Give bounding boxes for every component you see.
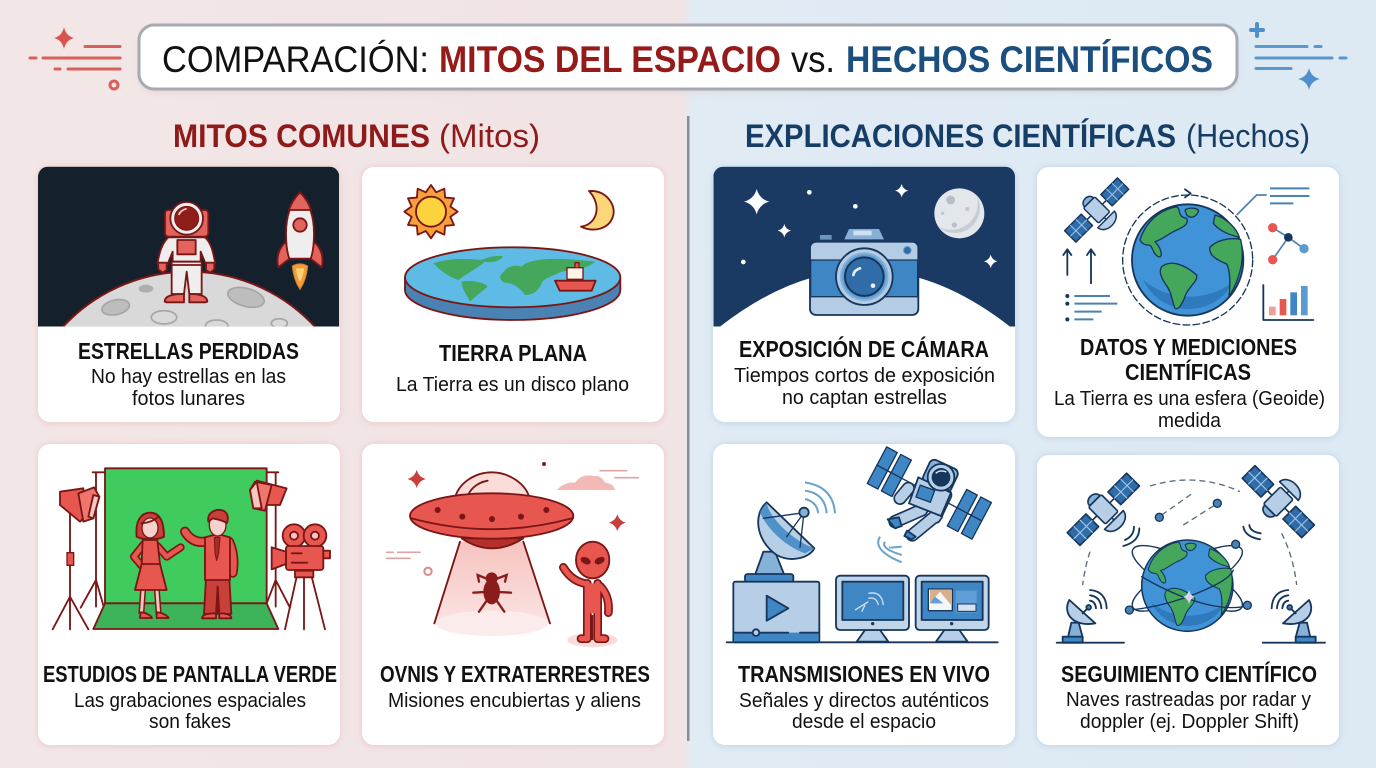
title: MITOS DEL ESPACIO — [439, 39, 781, 80]
icon: flat earth with sun and moon — [404, 185, 620, 320]
card text: no captan estrellas — [782, 386, 947, 409]
card title: ESTUDIOS DE PANTALLA VERDE — [43, 661, 337, 687]
icon: ufo, spider and alien — [387, 462, 638, 647]
icon: right sparkle decoration — [1251, 24, 1346, 90]
card text — [734, 364, 995, 409]
card title: DATOS Y MEDICIONES — [1080, 334, 1297, 360]
card text: No hay estrellas en las — [91, 365, 286, 388]
panel: tierra plana — [361, 166, 665, 424]
card text: Tiempos cortos de exposición — [734, 364, 995, 387]
title — [139, 25, 1237, 92]
card text — [74, 689, 306, 733]
card title: TIERRA PLANA — [439, 340, 587, 366]
card text: fotos lunares — [132, 387, 245, 410]
card text: Señales y directos auténticos — [739, 689, 989, 712]
panel: ovnis y extraterrestres — [361, 443, 665, 747]
card text: La Tierra es un disco plano — [396, 373, 629, 396]
panel: seguimiento científico — [1036, 454, 1340, 747]
card title: OVNIS Y EXTRATERRESTRES — [380, 661, 650, 687]
card text — [1054, 387, 1325, 432]
icon: earth tracked by satellites and radars — [1057, 455, 1325, 643]
icon: astronaut on moon with rocket — [38, 166, 340, 327]
card title: EXPOSICIÓN DE CÁMARA — [739, 335, 989, 362]
title: vs. — [791, 39, 835, 80]
card text — [1066, 688, 1312, 733]
card title: ESTRELLAS PERDIDAS — [78, 338, 299, 364]
card title: CIENTÍFICAS — [1125, 358, 1251, 385]
panel: estrellas perdidas — [36, 165, 342, 425]
card title: SEGUIMIENTO CIENTÍFICO — [1061, 660, 1317, 687]
heading: explicaciones científicas: EXPLICACIONES CIENTÍFICAS — [745, 118, 1176, 154]
icon: satellite dish, astronaut and monitors — [727, 447, 998, 642]
icon: green screen studio — [53, 468, 330, 629]
heading: mitos comunes: MITOS COMUNES — [173, 118, 430, 154]
card text — [739, 689, 989, 733]
icon: earth with satellite and data — [1059, 172, 1313, 325]
icon: left sparkle decoration — [30, 27, 120, 89]
title: HECHOS CIENTÍFICOS — [846, 39, 1213, 80]
card text: Naves rastreadas por radar y — [1066, 688, 1312, 711]
card text: medida — [1158, 409, 1222, 432]
heading: explicaciones científicas: (Hechos) — [1186, 118, 1310, 154]
panel: transmisiones en vivo — [712, 443, 1016, 747]
card text: doppler (ej. Doppler Shift) — [1080, 710, 1299, 733]
icon: camera under night sky — [713, 167, 1015, 327]
card text: Misiones encubiertas y aliens — [388, 689, 641, 712]
card title: TRANSMISIONES EN VIVO — [738, 661, 990, 687]
card text: son fakes — [149, 710, 231, 733]
card title — [1080, 334, 1297, 385]
card text — [91, 365, 286, 410]
panel: exposición de cámara — [712, 166, 1016, 424]
panel: estudios de pantalla verde — [37, 443, 341, 747]
card text: Las grabaciones espaciales — [74, 689, 306, 712]
panel: datos y mediciones científicas — [1036, 166, 1340, 439]
title: COMPARACIÓN: — [162, 39, 429, 80]
heading: mitos comunes: (Mitos) — [439, 118, 540, 154]
card text: La Tierra es una esfera (Geoide) — [1054, 387, 1325, 410]
card text: desde el espacio — [792, 710, 936, 733]
